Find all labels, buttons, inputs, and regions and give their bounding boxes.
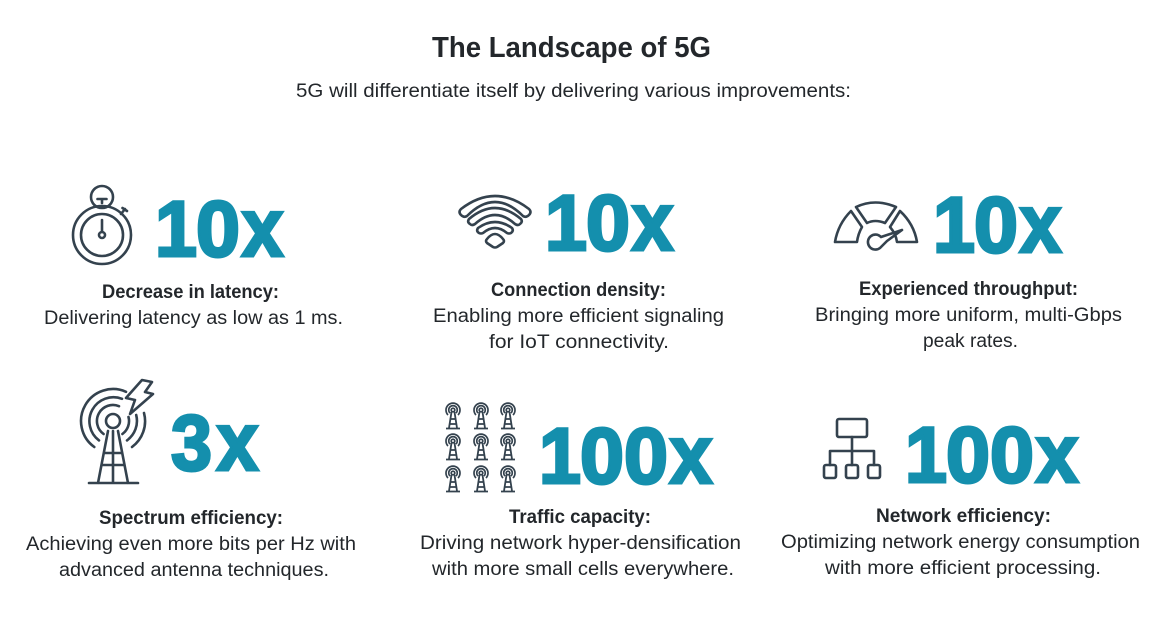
icon: stopwatch (73, 186, 131, 264)
text: connection density: Enabling more efficient signaling (433, 306, 724, 327)
panel: traffic capacity (420, 403, 741, 580)
panel: connection density (433, 175, 724, 353)
stat: 100x traffic (539, 408, 712, 501)
stat: 10x connection density (545, 175, 674, 268)
text: experienced throughput: Bringing more uniform, multi-Gbps (815, 305, 1122, 326)
text: decrease in latency (44, 282, 343, 329)
stat: 10x throughput: 0 (974, 180, 1018, 269)
icon: gauge (835, 202, 917, 250)
text: spectrum efficiency: Achieving even more bits per Hz with (26, 534, 356, 555)
stat: 100x traffic: x (670, 408, 712, 501)
text: experienced throughput: Experienced throughput: (859, 279, 1078, 300)
text: traffic capacity: Driving network hyper-densification (420, 533, 741, 554)
text: spectrum efficiency: Spectrum efficiency: (99, 508, 283, 529)
stat: 10x connection density: 1 (545, 178, 587, 267)
stat: 100x network: 0 (946, 410, 990, 499)
text: connection density: Connection density: (491, 280, 666, 301)
stat: 10x throughput: x (1020, 177, 1062, 270)
stat: 10x connection density: 0 (586, 178, 630, 267)
stat: 100x network: x (1036, 407, 1078, 500)
text: decrease in latency: Decrease in latency: (102, 282, 279, 303)
icon: tower with lightning (81, 380, 153, 483)
stat: 100x network (905, 407, 1078, 500)
text: network efficiency (781, 506, 1140, 579)
text: experienced throughput: peak rates. (923, 331, 1018, 352)
stat: 10x latency (155, 181, 284, 274)
text: spectrum efficiency: advanced antenna techniques. (59, 560, 329, 581)
stat: 10x latency: 0 (196, 184, 240, 273)
text: network efficiency: with more efficient processing. (824, 558, 1101, 579)
text: spectrum efficiency (26, 508, 356, 581)
icon: tower grid (446, 403, 515, 492)
text: traffic capacity: with more small cells everywhere. (431, 559, 734, 580)
stat: 100x traffic: 0 (580, 411, 624, 500)
stat: 100x network: 0 (990, 410, 1034, 499)
stat: 10x throughput: 1 (933, 180, 975, 269)
subtitle: 5G will differentiate itself by delivering various improvements: (296, 81, 851, 102)
stat: 10x latency: 1 (155, 184, 197, 273)
stat: 10x connection density: x (632, 175, 674, 268)
stat: 3x (171, 395, 258, 488)
text: traffic capacity: Traffic capacity: (509, 507, 651, 528)
stat: 3x: x (216, 395, 258, 488)
stat: 100x network: 1 (905, 410, 947, 499)
panel: latency (44, 181, 343, 329)
panel: spectrum efficiency (26, 380, 356, 581)
text: experienced throughput (815, 279, 1122, 352)
text: network efficiency: Network efficiency: (876, 506, 1051, 527)
stat: 100x traffic: 1 (539, 411, 581, 500)
text: network efficiency: Optimizing network energy consumption (781, 532, 1140, 553)
text: connection density (433, 280, 724, 353)
text: traffic capacity (420, 507, 741, 580)
panel: network efficiency (781, 407, 1140, 579)
text: connection density: for IoT connectivity. (489, 332, 669, 353)
stat: 10x throughput (933, 177, 1062, 270)
text: decrease in latency: Delivering latency as low as 1 ms. (44, 308, 343, 329)
icon: network hierarchy (824, 419, 880, 478)
stat: 3x: 3 (171, 398, 212, 487)
stat: 100x traffic: 0 (624, 411, 668, 500)
icon: wifi (460, 196, 530, 248)
panel: throughput (815, 177, 1122, 352)
title: The Landscape of 5G (432, 32, 711, 64)
stat: 10x latency: x (242, 181, 284, 274)
